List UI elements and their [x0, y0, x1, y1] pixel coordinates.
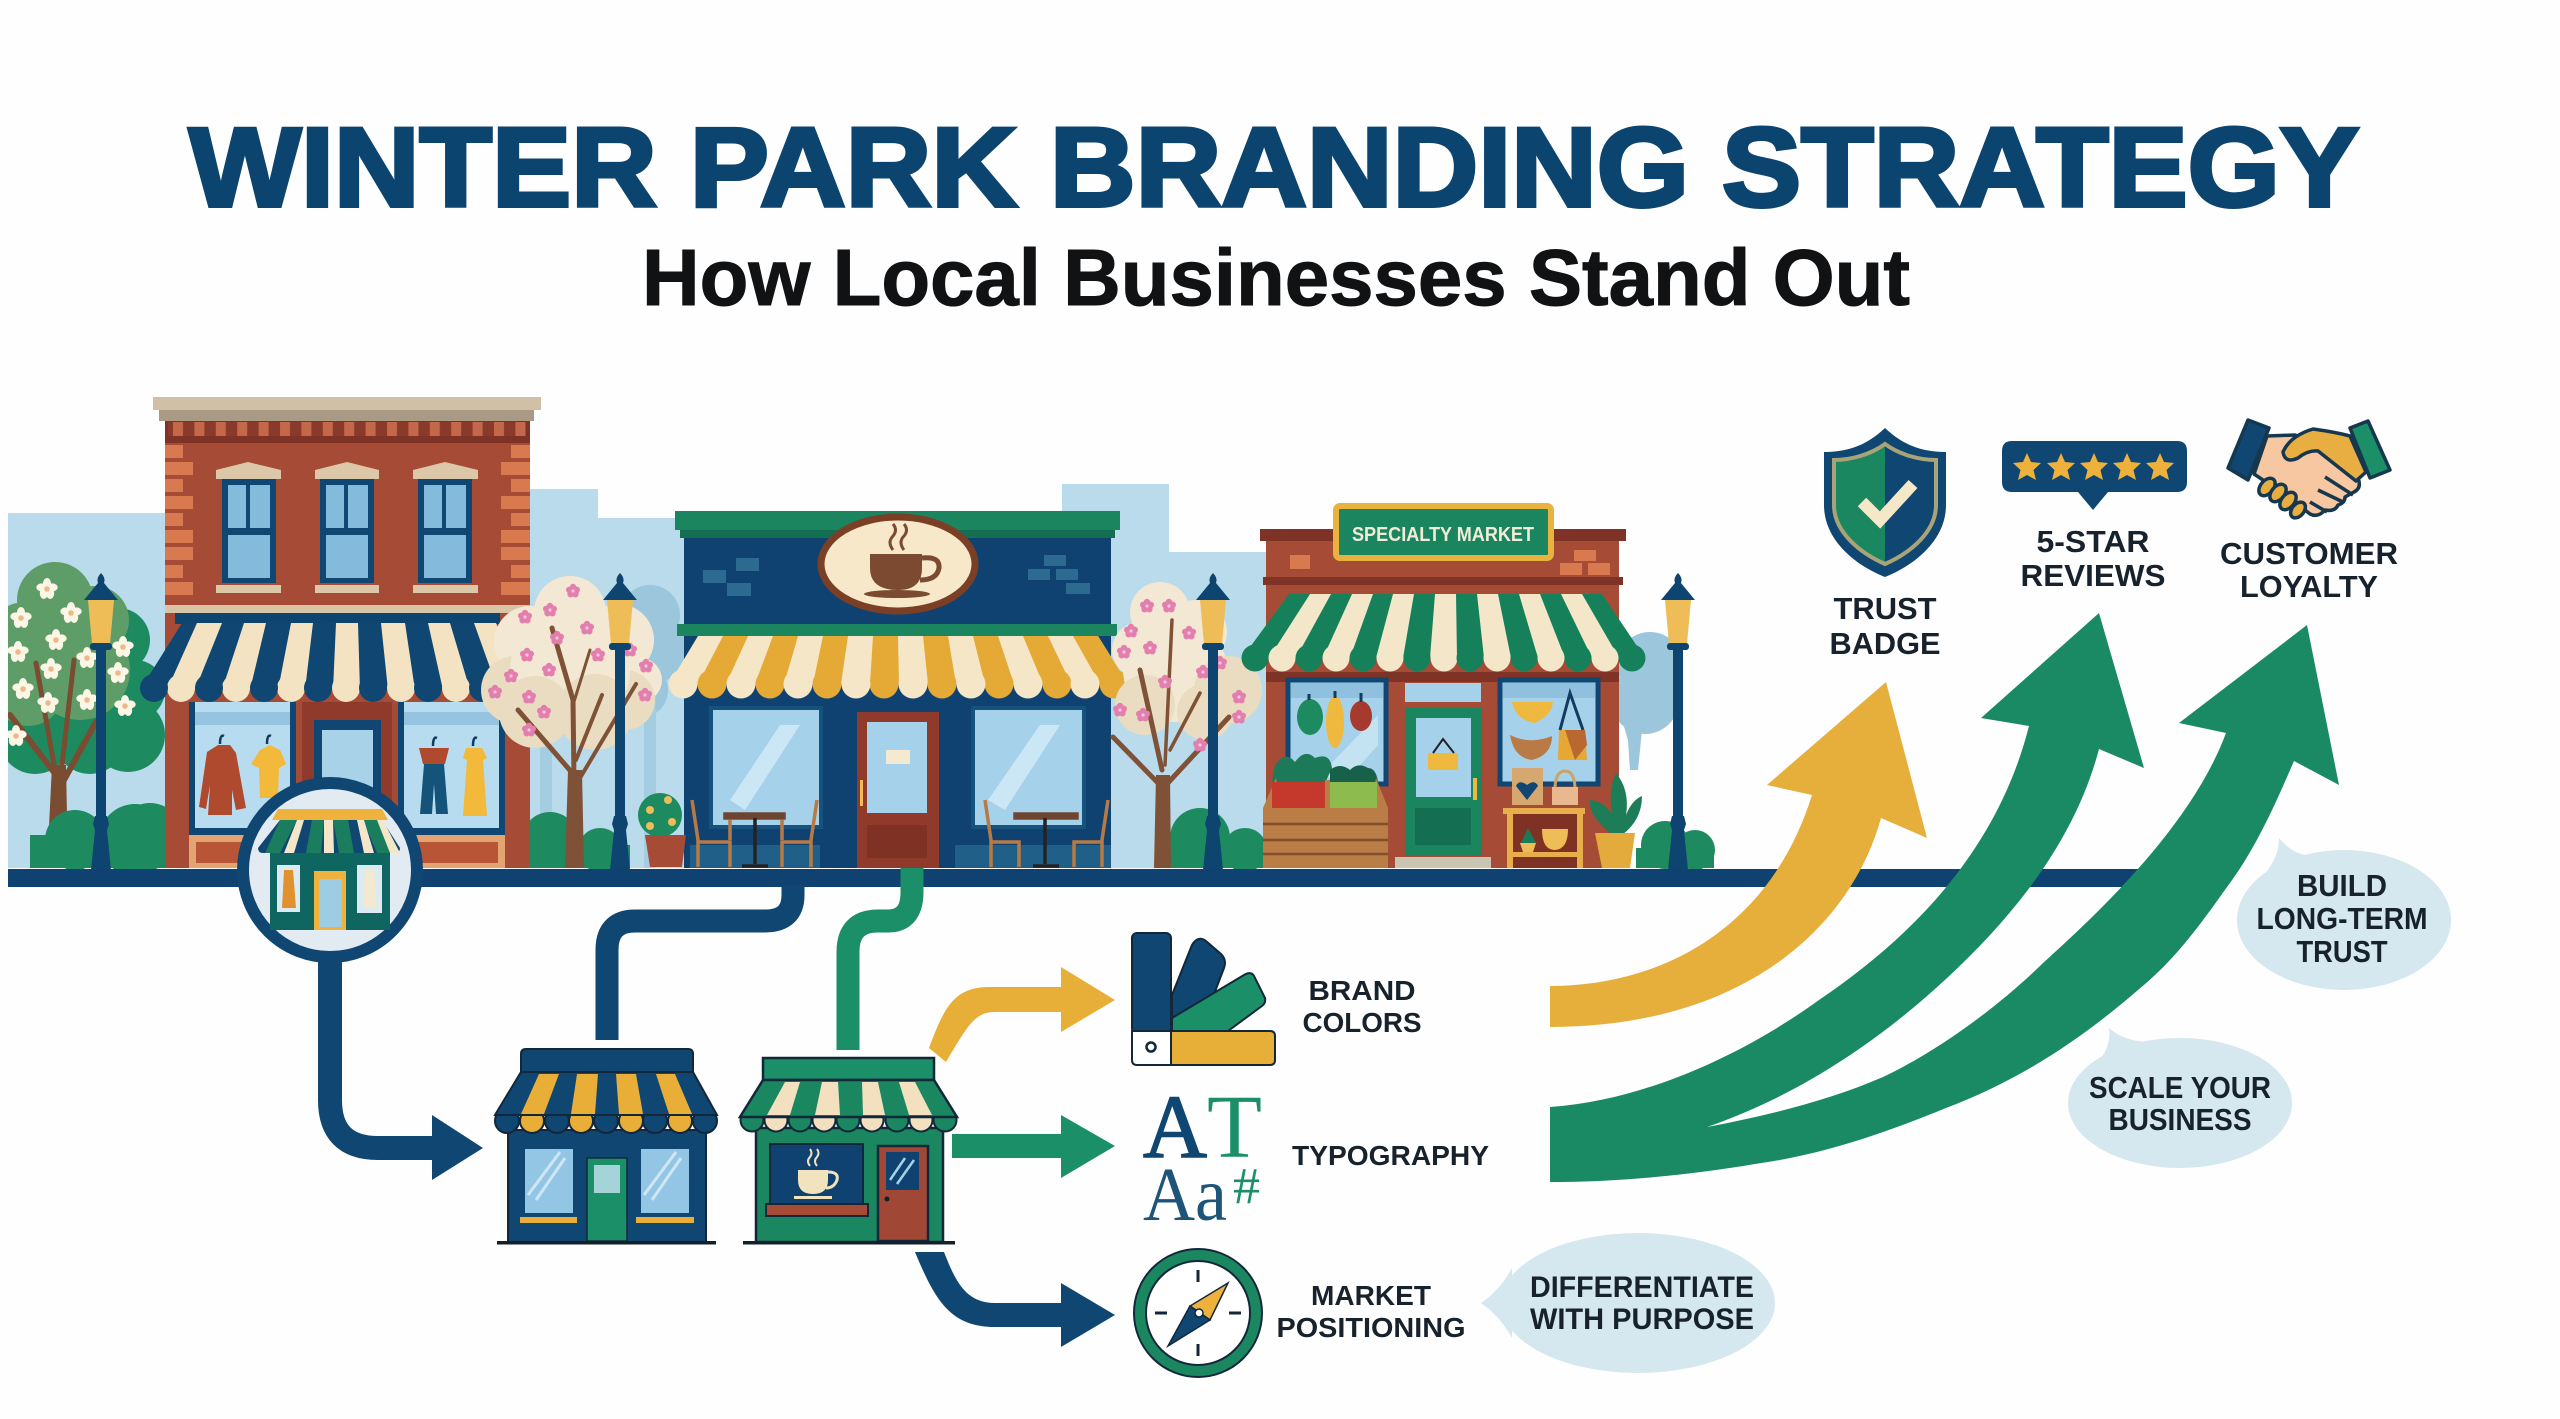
- icon: compass: [1134, 1249, 1262, 1377]
- cafe door: [857, 712, 939, 868]
- icon: typography letters: T: [1207, 1078, 1262, 1177]
- icon: handshake: [2228, 420, 2390, 521]
- subtitle: How Local Businesses Stand Out: [642, 233, 1910, 322]
- arrow: to market positioning: [915, 1252, 1115, 1347]
- tree: green with white blossoms: [0, 562, 165, 868]
- callout: scale your business: SCALE YOUR: [2089, 1070, 2271, 1105]
- brick quoins: [165, 445, 530, 595]
- label: customer loyalty: LOYALTY: [2240, 569, 2378, 604]
- tree: cream with pink blossoms right: [1112, 582, 1262, 868]
- label: brand colors: BRAND: [1308, 975, 1416, 1006]
- cafe tables and chairs: [692, 800, 1108, 867]
- sky and background blocks: [8, 484, 1270, 868]
- icon: typography letters: A: [1143, 1078, 1207, 1177]
- label: brand colors: [1302, 975, 1422, 1038]
- label: 5-star reviews: REVIEWS: [2020, 558, 2166, 593]
- background trees: [540, 585, 1683, 868]
- label: customer loyalty: CUSTOMER: [2220, 536, 2398, 571]
- coffee sign: [821, 517, 975, 611]
- callout: differentiate with purpose: DIFFERENTIATE: [1530, 1271, 1754, 1304]
- callout: differentiate with purpose: [1481, 1233, 1775, 1373]
- label: 5-star reviews: 5-STAR: [2036, 524, 2150, 559]
- storefront windows: [189, 702, 505, 868]
- arrow: to brand colors: [929, 967, 1115, 1062]
- shelf with goods: [1503, 768, 1585, 868]
- callout: scale your business: BUSINESS: [2108, 1102, 2252, 1137]
- arrow: to typography: [952, 1115, 1115, 1178]
- label: trust badge: BADGE: [1830, 626, 1940, 661]
- potted flowers: [638, 793, 686, 867]
- callout: build long-term trust: TRUST: [2296, 934, 2388, 969]
- icon: trust badge shield: [1824, 428, 1946, 577]
- label: trust badge: [1830, 591, 1940, 661]
- tree: cream with pink blossoms left: [481, 576, 662, 868]
- potted plant: [1590, 773, 1642, 868]
- icon: typography letters: [1143, 1078, 1262, 1237]
- magnifier circle: [243, 783, 417, 957]
- connector: green line from street: [848, 868, 912, 1050]
- callout: scale your business: [2068, 1028, 2292, 1168]
- icon: brand color swatch: [1132, 933, 1275, 1065]
- market door: [1395, 683, 1491, 868]
- label: 5-star reviews: [2020, 524, 2166, 593]
- cafe windows: [690, 708, 1111, 868]
- icon: typography letters: Aa: [1143, 1153, 1227, 1237]
- callout: build long-term trust: LONG-TERM: [2256, 901, 2428, 936]
- shop icon: green cafe: [740, 1058, 957, 1244]
- label: customer loyalty: [2220, 536, 2398, 604]
- icon: five star review bubble: [2002, 441, 2187, 510]
- street lamps: [81, 573, 1698, 886]
- label: typography: TYPOGRAPHY: [1292, 1140, 1489, 1171]
- market sign: SPECIALTY MARKET: [1352, 524, 1534, 546]
- connector: navy line from street: [607, 885, 793, 1040]
- navy striped awning: [140, 613, 530, 702]
- growth arrows: green pair: [1550, 613, 2339, 1182]
- callout: differentiate with purpose: WITH PURPOSE: [1530, 1303, 1754, 1336]
- ground line: [8, 869, 2173, 887]
- street scene: [0, 380, 2173, 900]
- label: market positioning: [1276, 1280, 1466, 1343]
- shop icon: navy and yellow: [495, 1049, 717, 1244]
- hanging clothes: [199, 736, 487, 816]
- specialty market building: [1242, 506, 1646, 868]
- arrow head: first shop: [432, 1115, 483, 1180]
- label: trust badge: TRUST: [1834, 591, 1937, 626]
- label: market positioning: MARKET: [1311, 1280, 1431, 1311]
- produce crate: [1263, 754, 1388, 868]
- callout: build long-term trust: BUILD: [2297, 868, 2387, 903]
- coffee shop building: [668, 511, 1128, 868]
- bushes: [30, 803, 1715, 876]
- title: WINTER PARK BRANDING STRATEGY: [189, 105, 2359, 230]
- label: brand colors: COLORS: [1302, 1007, 1422, 1038]
- upper windows: [216, 462, 478, 593]
- market windows: [1288, 680, 1598, 784]
- connector: navy line to first shop: [330, 960, 440, 1148]
- callout: build long-term trust: [2237, 838, 2451, 990]
- awning: green and cream: [1242, 594, 1646, 672]
- growth arrow: yellow: [1550, 682, 1927, 1027]
- label: market positioning: POSITIONING: [1276, 1312, 1466, 1343]
- market sign: [1336, 506, 1551, 558]
- brick building: [140, 397, 541, 868]
- yellow striped awning: [668, 636, 1128, 698]
- icon: typography letters: #: [1233, 1158, 1260, 1215]
